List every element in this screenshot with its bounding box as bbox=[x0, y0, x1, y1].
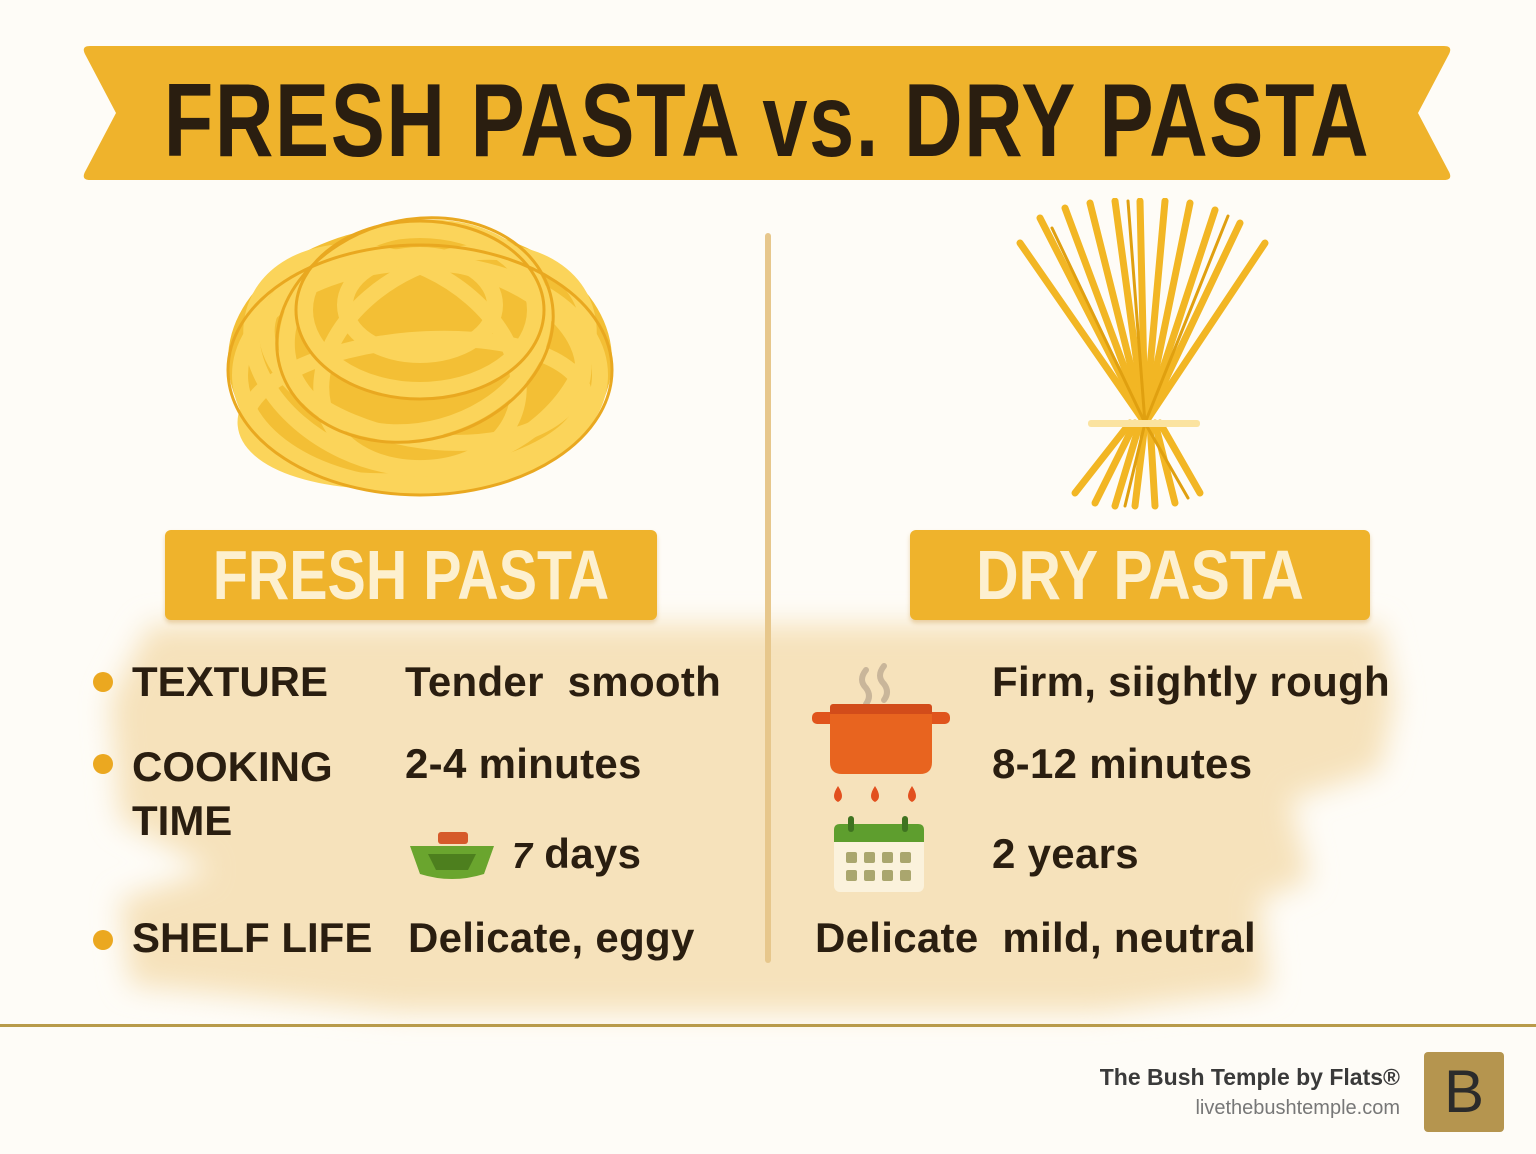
row: cooking time: COOKING bbox=[132, 743, 333, 790]
icon: pot on fire bbox=[812, 663, 950, 802]
logo: B bbox=[1444, 1058, 1484, 1125]
divider bbox=[765, 233, 771, 963]
footer brand text: livethebushtemple.com bbox=[1195, 1097, 1400, 1119]
heading: dry pasta: DRY PASTA bbox=[976, 536, 1304, 614]
footer brand text: The Bush Temple by Flats® bbox=[1100, 1064, 1400, 1090]
row: shelf life value with bowl icon bbox=[410, 830, 641, 879]
row: cooking time: 2-4 minutes bbox=[405, 740, 642, 787]
row: texture bbox=[93, 658, 721, 705]
row: shelf life value with bowl icon: 7 days bbox=[512, 830, 641, 877]
heading: fresh pasta bbox=[165, 530, 657, 620]
value: texture: Firm, siightly rough bbox=[992, 658, 1390, 705]
panel: dry pasta details bbox=[812, 658, 1390, 961]
icon: dry pasta bundle bbox=[1016, 198, 1268, 510]
footer line bbox=[0, 1024, 1536, 1027]
heading: fresh pasta: FRESH PASTA bbox=[213, 536, 609, 614]
row: shelf life: SHELF LIFE bbox=[132, 914, 372, 961]
value: cooking time: 8-12 minutes bbox=[992, 740, 1252, 787]
icon: calendar bbox=[834, 816, 924, 892]
value: shelf life: 2 years bbox=[992, 830, 1139, 877]
logo bbox=[1424, 1052, 1504, 1132]
row: cooking time bbox=[93, 740, 642, 844]
row: cooking time: TIME bbox=[132, 797, 232, 844]
row: shelf life bbox=[93, 914, 695, 961]
row: texture: TEXTURE bbox=[132, 658, 328, 705]
heading: dry pasta bbox=[910, 530, 1370, 620]
title banner: FRESH PASTA vs. DRY PASTA bbox=[164, 63, 1370, 179]
panel: fresh pasta details bbox=[93, 658, 721, 961]
value: flavor: Delicate mild, neutral bbox=[815, 914, 1256, 961]
icon: fresh pasta nest bbox=[226, 216, 614, 496]
footer brand text bbox=[1100, 1064, 1400, 1119]
row: shelf life: Delicate, eggy bbox=[408, 914, 695, 961]
row: texture: Tender smooth bbox=[405, 658, 721, 705]
